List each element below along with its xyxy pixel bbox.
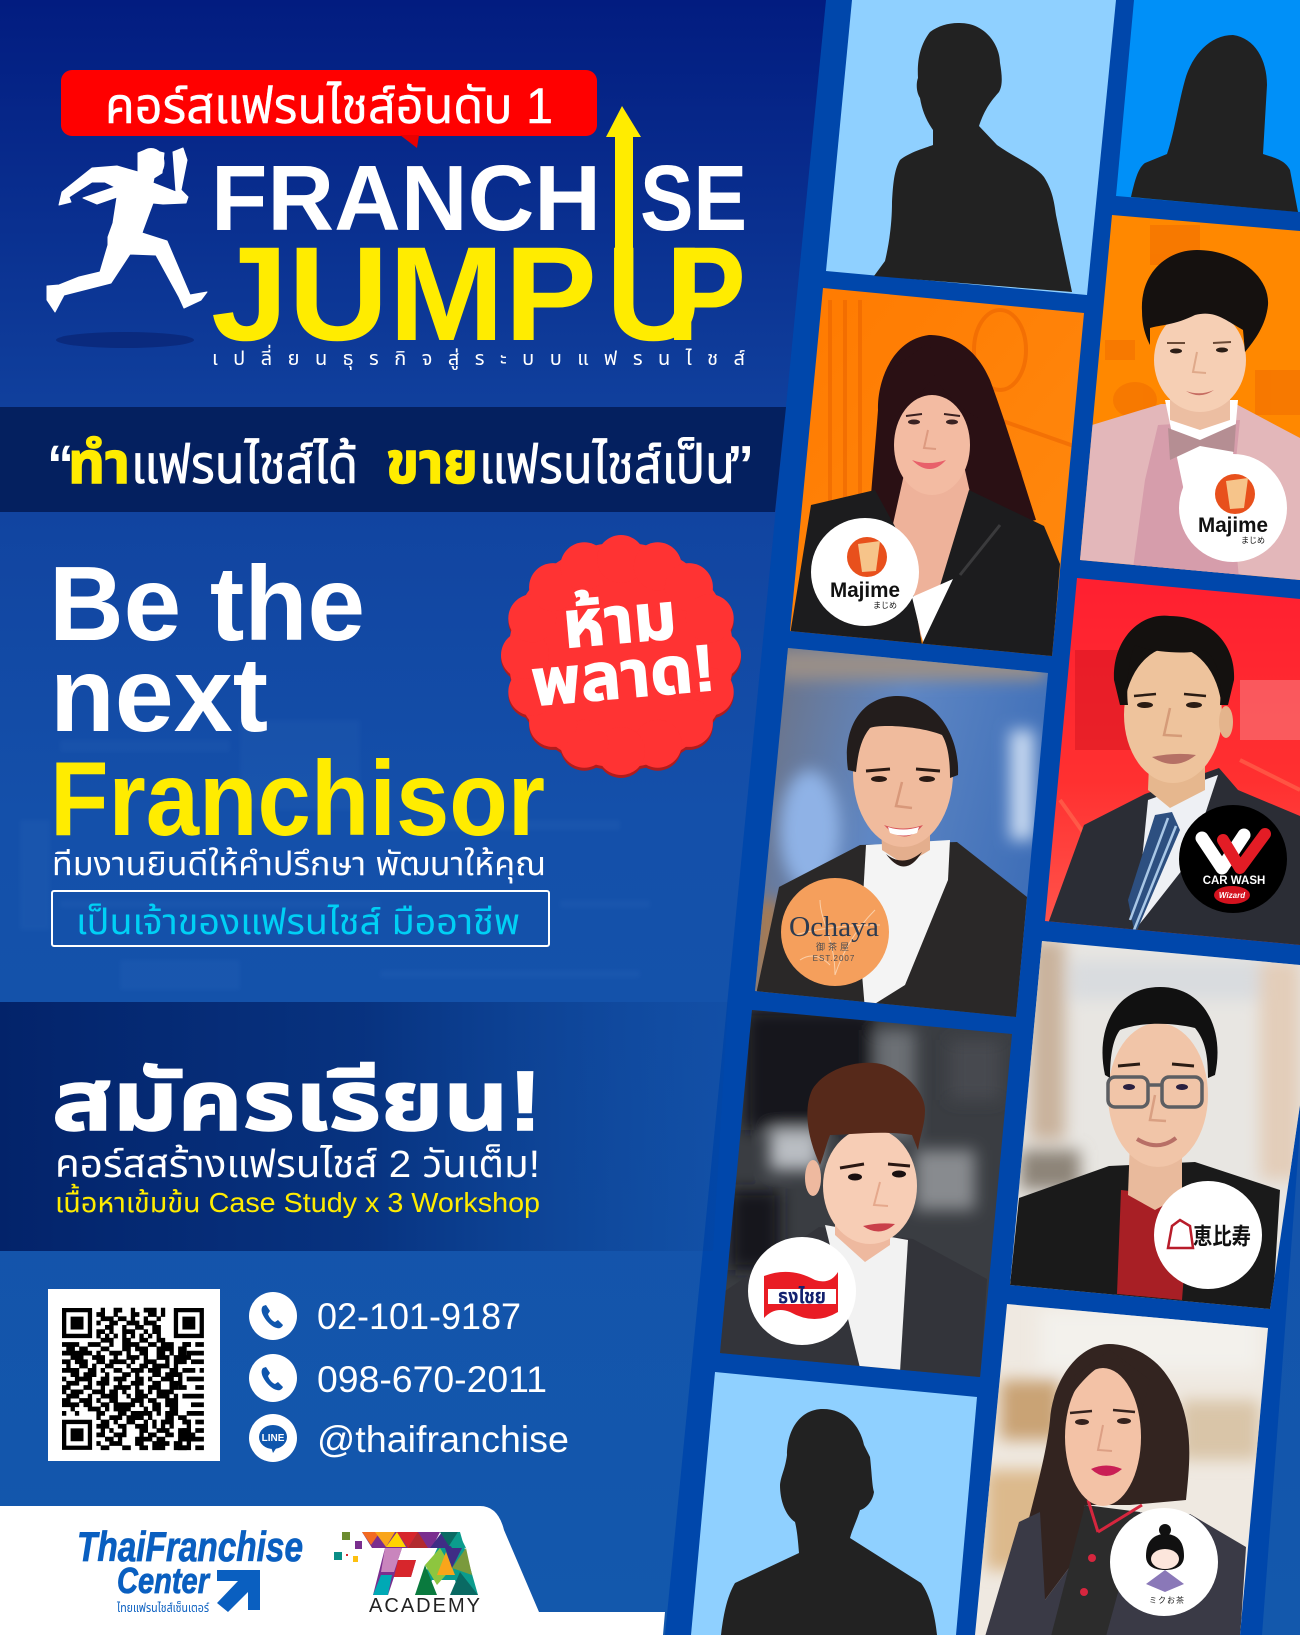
quote band: แฟรนไชส์เป็น — [479, 435, 735, 495]
logo: Car Wash badge: Wizard — [1219, 891, 1246, 900]
quote band: ” — [727, 435, 754, 495]
logo: Ebisu ramen badge: 恵比寿 — [1193, 1223, 1251, 1249]
heading: Be the next Franchisor: Franchisor — [50, 740, 545, 858]
title: Franchise Jump Up logo: SE — [640, 146, 747, 250]
logo: Majime badge: まじめ — [873, 601, 897, 610]
logo: Thongchai badge — [748, 1237, 856, 1345]
title: Franchise Jump Up logo: P — [666, 220, 746, 369]
icon: LINE — [249, 1414, 297, 1462]
arrow forming the letter I and U — [606, 106, 641, 310]
panel: man with goatee, Ochaya — [750, 645, 1055, 1020]
logo: Majime badge: Majime — [1198, 514, 1268, 537]
QR code — [48, 1289, 220, 1461]
logo: Thongchai badge: ธงไชย — [778, 1286, 826, 1308]
text: workshop: เนื้อหาเข้มข้น Case Study x 3 Workshop — [55, 1183, 540, 1218]
quote band: แฟรนไชส์ได้ — [131, 435, 358, 495]
red label — [61, 70, 597, 148]
tagline: เปลี่ยนธุรกิจสู่ระบบแฟรนไชส์ — [212, 344, 745, 371]
badge: do not miss: พลาด! — [528, 630, 718, 720]
logo: ThaiFranchise Center: Center — [117, 1560, 211, 1601]
logo: Miku Ocha badge: ミクお茶 — [1149, 1595, 1185, 1605]
heading: register: สมัครเรียน! — [52, 1054, 542, 1148]
panel: young man brown hair, Thongchai — [715, 1005, 1015, 1385]
logo: Ebisu ramen badge — [1154, 1181, 1262, 1289]
icon: LINE: LINE — [262, 1433, 285, 1444]
logo: FA Academy — [334, 1532, 480, 1617]
logo: Car Wash badge: CAR WASH — [1203, 875, 1265, 887]
logo: ThaiFranchise Center: ThaiFranchise — [77, 1523, 303, 1570]
logo: ThaiFranchise Center: ไทยแฟรนไชส์เซ็นเตอร์ — [116, 1601, 210, 1615]
quote band — [0, 407, 786, 512]
logo: ThaiFranchise Center — [77, 1523, 303, 1615]
panel: silhouette top centre — [826, 0, 1116, 295]
logo: Majime badge: まじめ — [1241, 536, 1265, 545]
red label: คอร์สแฟรนไชส์อันดับ 1 — [105, 78, 553, 134]
logo: Car Wash badge — [1179, 805, 1287, 913]
badge: do not miss — [501, 535, 741, 778]
icon: running man — [47, 148, 207, 348]
register band — [0, 1002, 728, 1251]
text: consult line: ทีมงานยินดีให้คำปรึกษา พัฒนาให้คุณ — [52, 845, 546, 884]
title: Franchise Jump Up logo: JUMP — [211, 220, 597, 369]
quote band: ทำ — [68, 431, 130, 496]
text: two-day course: คอร์สสร้างแฟรนไชส์ 2 วันเต็ม! — [55, 1144, 540, 1186]
logo: Majime badge: Majime — [830, 579, 900, 602]
quote band: “ — [47, 435, 74, 495]
text: phone 1: 02-101-9187 — [317, 1296, 521, 1337]
background texture — [20, 720, 650, 990]
heading: Be the next Franchisor: Be the — [49, 545, 365, 663]
panel: man with glasses — [1000, 935, 1300, 1320]
callout: professional owner — [52, 891, 549, 946]
title: Franchise Jump Up logo — [211, 106, 747, 369]
logo: Ochaya badge: Ochaya — [789, 912, 880, 943]
icon: phone — [249, 1354, 297, 1402]
panel: man on red, Car Wash — [1040, 575, 1300, 950]
logo: Majime badge — [811, 518, 919, 626]
panel: woman on orange, Majime — [780, 280, 1090, 660]
logo: Majime badge — [1179, 454, 1287, 562]
heading: Be the next Franchisor: next — [50, 636, 268, 754]
icon: phone — [249, 1292, 297, 1340]
badge: do not miss: ห้าม — [559, 578, 679, 662]
callout: professional owner: เป็นเจ้าของแฟรนไชส์ มืออาชีพ — [76, 901, 520, 942]
logo: Miku Ocha badge — [1110, 1508, 1218, 1616]
logo: Ochaya badge: 御茶屋 — [816, 941, 852, 952]
blue diagonal stripe — [665, 0, 1300, 1635]
panel: man in pink suit, Majime — [1075, 210, 1300, 590]
quote band: ขาย — [386, 431, 478, 496]
panel: silhouette top right — [1116, 0, 1300, 212]
panel: silhouette bottom — [691, 1372, 977, 1635]
logo: Ochaya badge: EST.2007 — [813, 954, 855, 963]
logo: Ochaya badge — [781, 878, 889, 986]
title: Franchise Jump Up logo: U — [606, 220, 703, 369]
text: phone 2: 098-670-2011 — [317, 1359, 547, 1400]
title: Franchise Jump Up logo: FRANCH — [211, 146, 601, 250]
footer white panel — [0, 1506, 665, 1635]
logo: FA Academy: ACADEMY — [369, 1595, 480, 1617]
text: LINE id: @thaifranchise — [317, 1419, 569, 1460]
panel: woman in dark uniform, Miku Ocha — [970, 1300, 1270, 1635]
heading: Be the next Franchisor — [49, 545, 545, 858]
